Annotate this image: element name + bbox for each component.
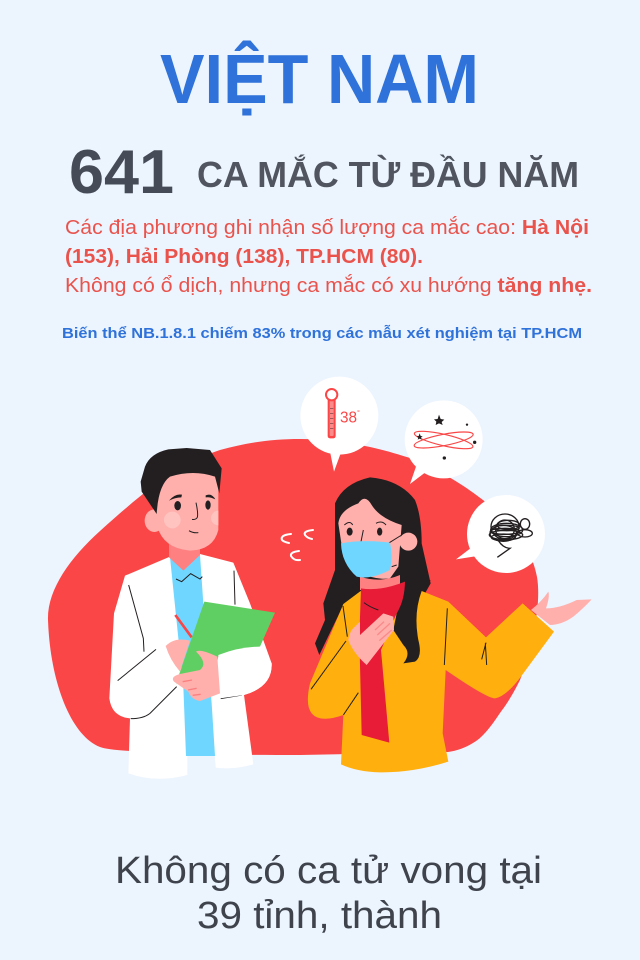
woman hand on chest	[348, 613, 394, 665]
doctor cheeks	[164, 511, 218, 528]
woman neck	[360, 575, 400, 590]
icon: scribble	[489, 514, 532, 557]
label: 38 degrees: 38	[340, 409, 357, 426]
woman ear	[399, 533, 417, 551]
text block: local case counts: (153), Hải Phòng (138), TP.HCM (80).	[65, 246, 423, 268]
woman hair back	[315, 477, 431, 655]
bubble: dizziness	[405, 400, 483, 484]
doctor hair	[141, 448, 222, 514]
headline: case count	[69, 138, 579, 207]
text block: local case counts: Các địa phương ghi nhận số lượng ca mắc cao: Hà Nội	[65, 216, 589, 239]
title: VIỆT NAM	[160, 39, 479, 118]
finger lines	[375, 622, 392, 641]
label: 38 degrees: °	[357, 408, 360, 417]
illustration: speech bubbles	[300, 377, 545, 573]
label: cases since start of year: CA MẮC TỪ ĐẦU NĂM	[197, 153, 579, 195]
doctor neck	[169, 537, 200, 571]
woman face	[338, 499, 402, 579]
doctor sleeve	[218, 647, 272, 698]
text block: no deaths: Không có ca tử vong tại	[115, 850, 542, 892]
symbol: worry marks	[282, 530, 313, 560]
icon: stars	[417, 415, 476, 460]
doctor face	[157, 463, 218, 551]
woman jacket	[308, 591, 554, 772]
woman eyes and nose	[344, 522, 402, 567]
woman hair right lock	[393, 580, 431, 663]
icon: thermometer	[326, 389, 337, 438]
text block: no deaths	[115, 850, 542, 937]
finger lines	[183, 680, 201, 695]
text block: no deaths: 39 tỉnh, thành	[197, 895, 442, 937]
number: 641: 641	[69, 138, 174, 207]
doctor hands	[166, 639, 220, 701]
illustration: doctor	[109, 448, 275, 779]
doctor eyes	[169, 494, 215, 510]
doctor coat	[109, 554, 272, 779]
scarf	[359, 582, 405, 743]
woman raised hand	[531, 592, 592, 625]
bubble: confusion	[456, 495, 545, 573]
face mask	[341, 541, 392, 578]
illustration: red background blob	[48, 439, 538, 755]
text block: variant note: Biến thể NB.1.8.1 chiếm 83% trong các mẫu xét nghiệm tại TP.HCM	[62, 325, 582, 342]
icon: dizzy orbit	[413, 428, 474, 452]
text block: local case counts	[65, 216, 592, 297]
woman jacket lines	[311, 603, 487, 715]
illustration: woman	[308, 477, 592, 772]
bubble: fever	[300, 377, 378, 472]
doctor nose and mouth	[118, 503, 242, 719]
clipboard	[176, 602, 275, 683]
pen	[175, 615, 192, 637]
doctor shirt	[170, 555, 215, 756]
doctor ear	[145, 509, 164, 532]
text block: local case counts: Không có ổ dịch, nhưng ca mắc có xu hướng tăng nhẹ.	[65, 274, 592, 297]
